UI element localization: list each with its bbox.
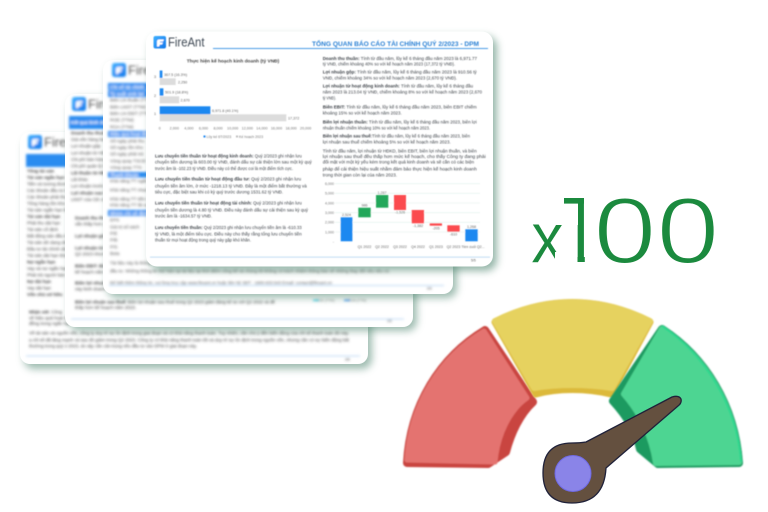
bar chart: business plan: 501.9 (18.8%) (165, 90, 188, 94)
text block: business results commentary: năm 2023 là 213.04 tỷ VNĐ, chiếm khoảng 8% so với kế hoạch năm 2023 (2,670 (323, 89, 482, 95)
chart legend: Kế hoạch 2023 (239, 135, 263, 139)
waterfall chart: quarterly net profit: 2,524 (342, 213, 351, 217)
panel: report page 2 (back): này kinh doanh 2023 (75, 287, 118, 292)
waterfall chart: quarterly net profit: Q2 2022 (375, 245, 389, 249)
gauge: yellow segment (495, 302, 650, 394)
panel: report page 2 (back): Biên lợi nhuận thuần: (75, 281, 123, 286)
bar chart: business plan: 2,000 (170, 126, 179, 130)
waterfall chart: quarterly net profit: -1,526 (395, 210, 405, 214)
panel: report page 3 (back): FireAnt (128, 62, 170, 78)
panel: report page 2 (back): Lợi nhuận gộp (71, 144, 101, 149)
panel: report page 1 (back): thường trong quý 2 2023, do vậy cần cân trọng nếu đầu tư vào DPM ở giai đoạn này. (29, 342, 197, 348)
multiplier label: x100: 0 (594, 179, 656, 284)
waterfall chart: quarterly net profit: 1,268 (467, 225, 476, 229)
panel: report page 1 (back): Đầu tư tài chính dài hạn (27, 247, 76, 252)
bar chart: business plan: 14,000 (256, 126, 268, 130)
bar chart: business plan: 4,000 (184, 126, 194, 130)
panel: report page 3 (back): Khả năng TT nhanh (110, 188, 151, 193)
panel: report page 2 (back): Lãi khác (71, 177, 89, 182)
panel: report page 1 (back): Các khoản phải thu (27, 195, 67, 200)
panel: report page 2 (back): Q2 2023 nhưng vẫn thấp (75, 251, 127, 257)
text block: business results commentary: đối mặt với một kỳ yếu kém trong kết quả kinh doanh và sẽ cần có các biện (323, 159, 474, 164)
text block: cash flow commentary: tiêu cực, đặc biệt sau khi có kỳ quý trước dương 1531.62 tỷ VNĐ. (155, 189, 283, 195)
gauge: needle (543, 396, 681, 503)
waterfall chart: quarterly net profit: 6,000 (325, 182, 334, 186)
bar chart: business plan: 2,670 (180, 98, 190, 102)
panel: report page 2 (back): Chi phí quản lý DN (71, 164, 110, 169)
bar chart: business plan: 2,250 (178, 80, 187, 84)
waterfall chart: quarterly net profit: 986 (362, 204, 368, 208)
panel: report page 3 (back): ROE (TTM) (110, 118, 134, 123)
text block: business results commentary: VNĐ, chiếm khoảng 34% so với kế hoạch năm 2023 (2,670 tỷ VNĐ). (323, 75, 457, 81)
waterfall chart: quarterly net profit: Q3 2022 (393, 245, 407, 249)
text block: cash flow commentary: trước âm là -1634.57 tỷ VNĐ. (155, 213, 212, 219)
panel: report page 1 (back): Tổng tài sản (27, 168, 54, 174)
panel: report page 3 (back): Hiệu quả hoạt động (110, 132, 153, 136)
panel: report page 1 (back): a chỉ số đã tăng mạnh và sau đó giảm trong Q2 2023. Công ty có khả năng thanh toán tốt và duy trì sự ổn định trong nguồn vốn, nhưng cần có sự biến động bất (29, 336, 350, 342)
waterfall chart: quarterly net profit: - (333, 240, 335, 244)
panel: report page 1 (back): Các khoản đầu tư tài chính (27, 188, 83, 193)
bar chart: business plan (154, 58, 311, 139)
panel: report page 3 (back): 5/5 (427, 286, 432, 290)
panel: report page 3 (back): Biên LN thuần (TTM) (110, 98, 153, 103)
panel: report page 3 (back): Số ngày phải thu (110, 138, 145, 143)
panel: report page 1 (back): về hiệu quả hoạt động (29, 315, 75, 320)
panel: report page 3 (back): Số ngày phải trả (110, 152, 144, 157)
text block: cash flow commentary: Lưu chuyển tiền thuần từ hoạt động tài chính: Quý 2/2023 ghi nhận lưu (155, 200, 302, 206)
panel: report page 1 (back) (20, 132, 372, 369)
panel: report page 1 (back): FireAnt (44, 134, 86, 150)
panel: report page 3 (back) (103, 60, 457, 298)
text block: cash flow commentary: tỷ VNĐ, là một điểm tiêu cực. Điều này cho thấy rằng tổng lưu chuyển tiền (155, 230, 302, 236)
waterfall chart: quarterly net profit (325, 182, 485, 249)
bar chart: business plan: 12,000 (242, 126, 253, 130)
waterfall chart: quarterly net profit: Q1 2023 (429, 245, 443, 249)
text block: business results commentary: tỷ VNĐ). (323, 95, 336, 101)
panel: report page 1 (back): Nhận xét: Công (29, 309, 63, 314)
panel: report page 1 (back): Phải trả người bán (27, 273, 66, 278)
text block: business results commentary: pháp để cải thiện hiệu suất nhằm đảm bảo thực hiện kế hoạch kinh doanh (323, 165, 477, 171)
waterfall chart: quarterly net profit: -1,382 (413, 224, 423, 228)
panel: report page 2 (back): Doanh thu thuần (71, 130, 108, 135)
bar chart: business plan: 6,971.8 (40.1%) (212, 109, 238, 113)
panel: report page 1 (back): Tài sản dài hạn (27, 214, 60, 219)
text block: cash flow commentary: thuần từ mọi hoạt động trong quý này gặp khó khăn. (155, 237, 251, 242)
panel: report page 2 (back): Lợi nhuận từ hoạt động (75, 246, 127, 251)
multiplier label: x100: 1 (553, 178, 605, 283)
panel: report page 1 (back): đồng trong ngắn hạn (29, 320, 72, 326)
panel: report page 1 (back): Nợ dài hạn (27, 279, 51, 284)
bar chart: business plan: Thực hiện kế hoạch kinh doanh (tỷ VNĐ) (187, 58, 280, 64)
panel: report page 1 (back): Nợ ngắn hạn (27, 259, 55, 265)
panel: report page 3 (back): Khả năng TT tiền mặt (110, 197, 155, 202)
logo: FireAnt (154, 34, 205, 50)
bar chart: business plan: 10,000 (227, 126, 238, 130)
panel: report page 2 (back): ROA (TTM) (348, 298, 366, 302)
text block: business results commentary: tỷ VNĐ, chiếm khoảng 40% so với kế hoạch năm 2023 (17,372 tỷ VNĐ). (323, 61, 455, 67)
text block: business results commentary: Lợi nhuận từ hoạt động kinh doanh: Tính từ đầu năm, lũy kế 6 tháng đầu (323, 84, 473, 89)
waterfall chart: quarterly net profit: -205 (432, 226, 440, 230)
bar chart: business plan: 16,000 (271, 126, 282, 130)
waterfall chart: quarterly net profit: -610 (450, 232, 457, 236)
bar chart: business plan: 8,000 (213, 126, 223, 130)
waterfall chart: quarterly net profit: 2,000 (325, 221, 334, 225)
panel: report page 1 (back): Tài sản ngắn hạn (27, 174, 65, 180)
text block: cash flow commentary: chuyển tiền dương là 603.00 tỷ VNĐ, đánh dấu sự cải thiện lớn sau một kỳ quý (155, 158, 312, 164)
panel: report page 3 (back): Thanh khoản (110, 172, 139, 178)
panel: report page 3 (back): Số ngày tồn kho (110, 145, 144, 150)
text block: cash flow commentary: chuyển tiền âm lớn, ở mức -1218.13 tỷ VNĐ. Đây là một điểm bất thường và (155, 182, 307, 188)
panel: report page 3 (back): Tỷ suất sinh lợi (110, 90, 144, 96)
bar chart: business plan: 2 (154, 94, 156, 98)
text block: business results commentary: Doanh thu thuần: Tính từ đầu năm, lũy kế 6 tháng đầu năm 2023 là 6,971.77 (323, 56, 477, 61)
panel: report page 1 (back): Tài sản dở dang dài hạn (27, 239, 77, 245)
panel: report page 1 (back): Tổng hàng tồn kho (27, 200, 66, 206)
text block: business results commentary: Biên lợi nhuận sau thuế:Tính từ đầu năm, lũy kế 6 tháng đầu năm 2023, biên (323, 133, 470, 139)
panel: report page 1 (back): Vốn chủ sở hữu (27, 291, 63, 297)
text block: business results commentary: nhuận thuần chiếm khoảng 10% so với kế hoạch năm 2023. (323, 125, 430, 130)
multiplier label: x100: x (531, 197, 564, 278)
panel: report page 3 (back): Vòng quay TSCĐ (110, 158, 146, 163)
panel: report page 3 (back): Khả năng TT lãi vay (110, 203, 151, 208)
panel: report page 3 (back): P/B (110, 238, 117, 243)
panel: report page 3 (back): Chỉ số tài chính (110, 84, 144, 90)
waterfall chart: quarterly net profit: 5,000 (325, 192, 334, 196)
waterfall chart: quarterly net profit: Q1 2022 (358, 245, 371, 249)
bar chart: business plan: 20,000 (300, 126, 311, 130)
panel: report page 2 (back): Biên EBIT: Biên EBIT (75, 264, 121, 269)
panel: report page 3 (back): đầu tư. Những thông tin thể hiện tại tài liệu tại thời điểm công bố và chúng tôi không có trách nhiệm thông báo về những thay đổi nếu nếu có. (110, 268, 390, 274)
panel: report page 1 (back): Tài sản cố định (27, 227, 59, 232)
multiplier label: x100 (531, 178, 719, 284)
waterfall chart: quarterly net profit: 4,000 (325, 201, 334, 205)
bar chart: business plan: 1 (154, 112, 156, 116)
panel: report page 1 (back): Bất động sản đầu tư (27, 234, 69, 239)
bar chart: business plan: 6,000 (199, 126, 208, 130)
panel: report page 3 (back): P/E (110, 231, 117, 236)
text block: business results commentary: Tính từ đầu năm, lợi nhuận từ HĐKD, biên EBIT, biên lợi nhuận thuần, và biên (323, 148, 477, 153)
panel: report page 3 (back): Beta (110, 251, 120, 256)
bar chart: business plan: 367.5 (16.3%) (164, 73, 187, 77)
panel: report page 3 (back): Khả năng TT ngắn hạn (110, 178, 157, 184)
panel: report page 2 (back): 4/5 (387, 319, 392, 323)
text block: cash flow commentary: Lưu chuyển tiền thuần từ hoạt động kinh doanh: Quý 2/2023 ghi nhận lưu (155, 152, 302, 158)
chart legend: Lũy kế 6T/2023 (206, 135, 231, 139)
text block: cash flow commentary: Lưu chuyển tiền thuần: Quý 2/2023 ghi nhận lưu chuyển tiền âm là -610.33 (155, 224, 302, 230)
text block: business results commentary: Biên EBIT: Tính từ đầu năm, lũy kế 6 tháng đầu năm 2023, biên EBIT chiếm (323, 105, 477, 110)
panel: report page 3 (back): P/S (110, 244, 117, 249)
bar chart: business plan: 18,000 (285, 126, 297, 130)
text block: business results commentary: lợi nhuận sau thuế đều thấp hơn mức kế hoạch, cho thấy Công ty đang phải (323, 154, 486, 159)
panel: report page 3 (back): Biên LN EBIT (TTM) (110, 111, 152, 116)
text block: business results commentary: trong thời gian còn lại của năm 2023. (323, 172, 397, 178)
text block: business results commentary: khoảng 15% so với kế hoạch năm 2023. (323, 111, 402, 116)
bar chart: business plan: 3 (154, 75, 156, 79)
waterfall chart: quarterly net profit: 1,287 (378, 191, 386, 195)
panel: report page 1 (back): 3/5 (345, 358, 350, 362)
panel: report page 1 (back): Tiền và tương đương tiền (27, 182, 80, 187)
panel: report page 1 (back): Tài sản dài hạn khác (27, 253, 70, 258)
text block: cash flow commentary: chuyển tiền dương là 4.80 tỷ VNĐ. Điều này đánh dấu sự cải thiện sau kỳ quý (155, 206, 309, 212)
gauge: red segment (407, 330, 533, 464)
chart legend (204, 135, 263, 139)
waterfall chart: quarterly net profit: Tiền cuối Q2... (461, 245, 485, 249)
panel: main report page (146, 32, 497, 271)
gauge: green segment (613, 326, 741, 464)
panel: report page 3 (back): Biên LNST (TTM) (110, 104, 146, 109)
text block: cash flow commentary: Lưu chuyển tiền thuần từ hoạt động đầu tư: Quý 2/2023 ghi nhận lưu (155, 176, 301, 182)
panel: report page 1 (back): Về tài sản và nguồn vốn, công ty duy trì sự ổn định trong giai đoạn và có khả năng thanh toán. Tuy nhiên, cần chú ý đến biến động của chỉ số thanh toán đó này. (29, 330, 349, 336)
waterfall chart: quarterly net profit: 1,000 (325, 230, 334, 234)
text block: business results commentary: Biên lợi nhuận thuần: Tính từ đầu năm, lũy kế 6 tháng đầu năm 2023, biên lợi (323, 120, 477, 125)
panel: report page 2 (back): LNST của CĐ công ty mẹ (71, 196, 123, 202)
panel: report page 2 (back): Chi phí bán hàng (71, 157, 106, 162)
panel: report page 2 (back): Biên lợi nhuận sau thuế: Biên lợi nhuận sau thuế trong Q2 2023 giảm đáng kể so với Q2 2022 và đề (75, 298, 275, 304)
report title: TỔNG QUAN BÁO CÁO TÀI CHÍNH QUÝ 2/2023 - DPM (312, 39, 479, 48)
panel: report page 2 (back): kế hoạch năm 2023 (75, 269, 116, 274)
text block: business results commentary (323, 56, 486, 178)
panel: report page 2 (back): Lãi thuần từ HĐKD (71, 170, 113, 175)
panel: report page 1 (back): Tài sản ngắn hạn khác (27, 207, 74, 213)
panel: report page 3 (back): Nhóm chỉ số định giá (110, 210, 157, 216)
text block: business results commentary: lợi nhuận sau thuế chiếm khoảng 5% so với kế hoạch năm 2023. (323, 140, 451, 145)
text block: business results commentary: Lợi nhuận gộp: Tính từ đầu năm, lũy kế 6 tháng đầu năm 2023 là 910.56 tỷ (323, 69, 477, 75)
panel: report page 1 (back): Vay và nợ ngắn hạn (27, 265, 68, 271)
panel: report page 2 (back): Lợi nhuận sau thuế (71, 189, 114, 195)
panel: report page 2 (back): Lợi nhuận từ HĐTC (71, 150, 112, 155)
icon: speedometer gauge (407, 302, 741, 503)
page footer: 5/5 (471, 258, 476, 262)
panel: report page 1 (back): Vay dài hạn (27, 286, 51, 291)
panel: report page 1 (back): Phải thu dài hạn (27, 221, 61, 226)
logo: FireAnt: FireAnt (168, 34, 205, 50)
panel: report page 2 (back): ROE (TTM) (316, 298, 335, 302)
panel: report page 3 (back): Vòng quay TTS (110, 165, 142, 170)
panel: report page 2 (back) (65, 94, 417, 331)
panel: report page 2 (back): FireAnt (88, 96, 130, 112)
panel: report page 3 (back): Tài liệu này là thông tin (110, 260, 158, 265)
waterfall chart: quarterly net profit: Q2 2023 (447, 245, 460, 249)
panel: report page 2 (back): Kết quả kinh doanh (71, 119, 114, 125)
waterfall chart: quarterly net profit: Q4 2022 (411, 245, 425, 249)
panel: report page 2 (back): Lợi nhuận trước thuế (71, 184, 115, 189)
panel: report page 2 (back): Doanh thu thuần: (75, 216, 113, 221)
bar chart: business plan: 17,372 (288, 116, 299, 120)
bar chart: business plan: 0 (159, 126, 161, 130)
panel: report page 3 (back): Để biết thêm thông tin, vui lòng truy cập www.fireant.vn hoặc liên hệ SĐT : 1900.633.543 Email: contact@fireant.vn (110, 279, 332, 285)
panel: report page 2 (back): vẫn thấp hơn cùng kỳ (75, 221, 120, 227)
waterfall chart: quarterly net profit: 3,000 (325, 211, 334, 215)
text block: cash flow commentary: trước âm là -102.23 tỷ VNĐ. Điều này có thể được coi là một điểm tích cực. (155, 165, 293, 171)
panel: report page 3 (back): EPS (110, 218, 119, 223)
panel: report page 3 (back): ROA (TTM) (110, 124, 134, 129)
multiplier label: x100: 0 (656, 179, 719, 284)
panel: report page 2 (back): Giá vốn hàng bán (71, 137, 108, 142)
panel: report page 2 (back): Lợi nhuận gộp: (75, 234, 109, 239)
text block: cash flow commentary (155, 152, 312, 242)
panel: report page 3 (back): Giá trị sổ sách (110, 223, 140, 229)
panel: report page 2 (back): thấp hơn kế hoạch năm 2023. (75, 305, 136, 310)
